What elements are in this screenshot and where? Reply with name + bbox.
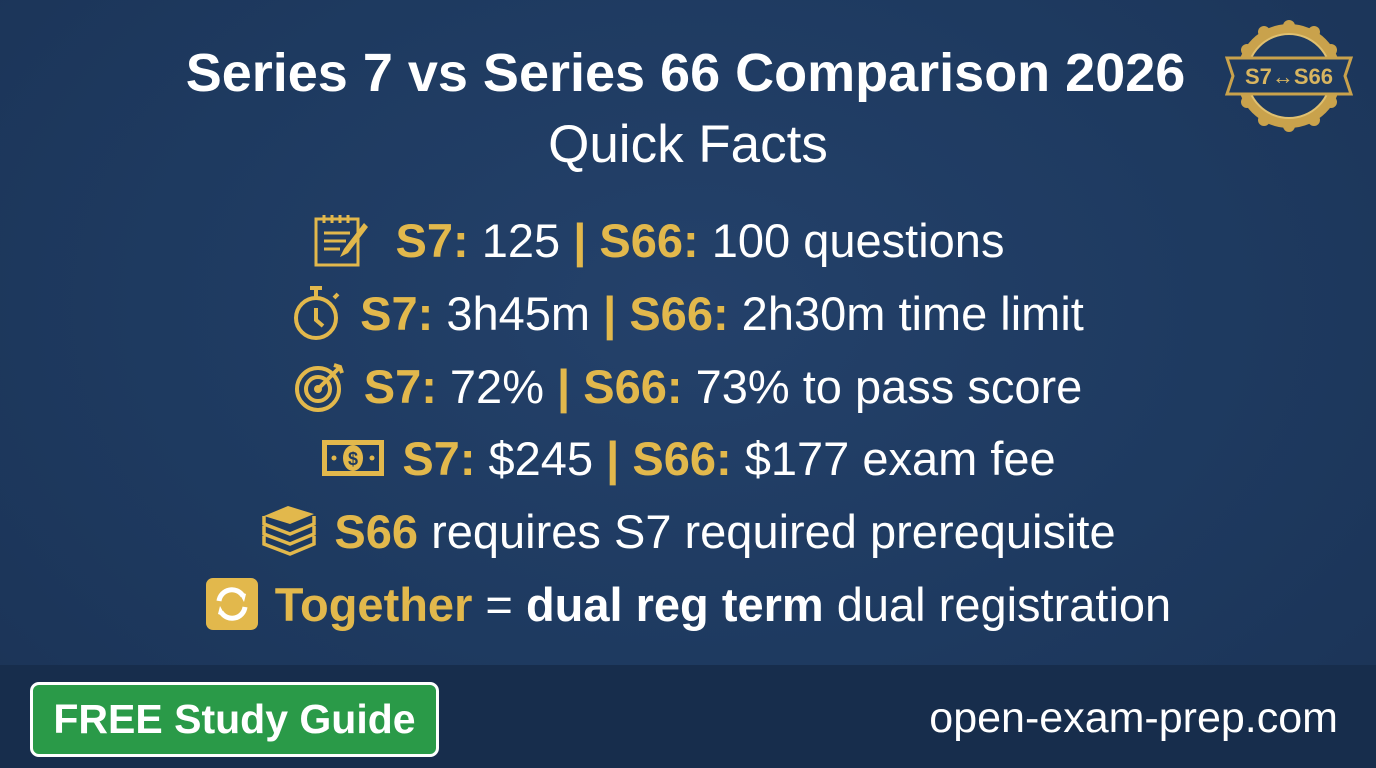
row: pass score: S7: 72% | S66: 73% to pass score <box>364 360 1082 412</box>
badge: S7 vs S66: S7↔S66 <box>1245 64 1333 89</box>
row: prerequisite: S66 requires S7 required prerequisite <box>334 504 1116 558</box>
icon: stopwatch <box>294 286 340 340</box>
icon: banknote: $ <box>348 449 358 469</box>
icon: notepad <box>314 215 368 266</box>
icon: target <box>295 363 344 412</box>
button: free study guide <box>30 682 439 757</box>
button: free study guide: FREE Study Guide <box>53 696 416 742</box>
icon: sync <box>206 578 258 630</box>
row: time: S7: 3h45m | S66: 2h30m time limit <box>360 286 1084 340</box>
footer url: open-exam-prep.com <box>929 694 1338 742</box>
icon: books <box>262 506 316 556</box>
badge: S7 vs S66 <box>1225 20 1353 132</box>
footer <box>0 665 1376 768</box>
title: Series 7 vs Series 66 Comparison 2026 <box>186 43 1185 103</box>
row: fee: S7: $245 | S66: $177 exam fee <box>402 432 1056 484</box>
row: questions: S7: 125 | S66: 100 questions <box>396 214 1004 266</box>
subtitle: Quick Facts <box>548 115 828 174</box>
row: dual registration: Together = dual reg term dual registration <box>275 578 1171 630</box>
icon: banknote <box>322 440 384 476</box>
